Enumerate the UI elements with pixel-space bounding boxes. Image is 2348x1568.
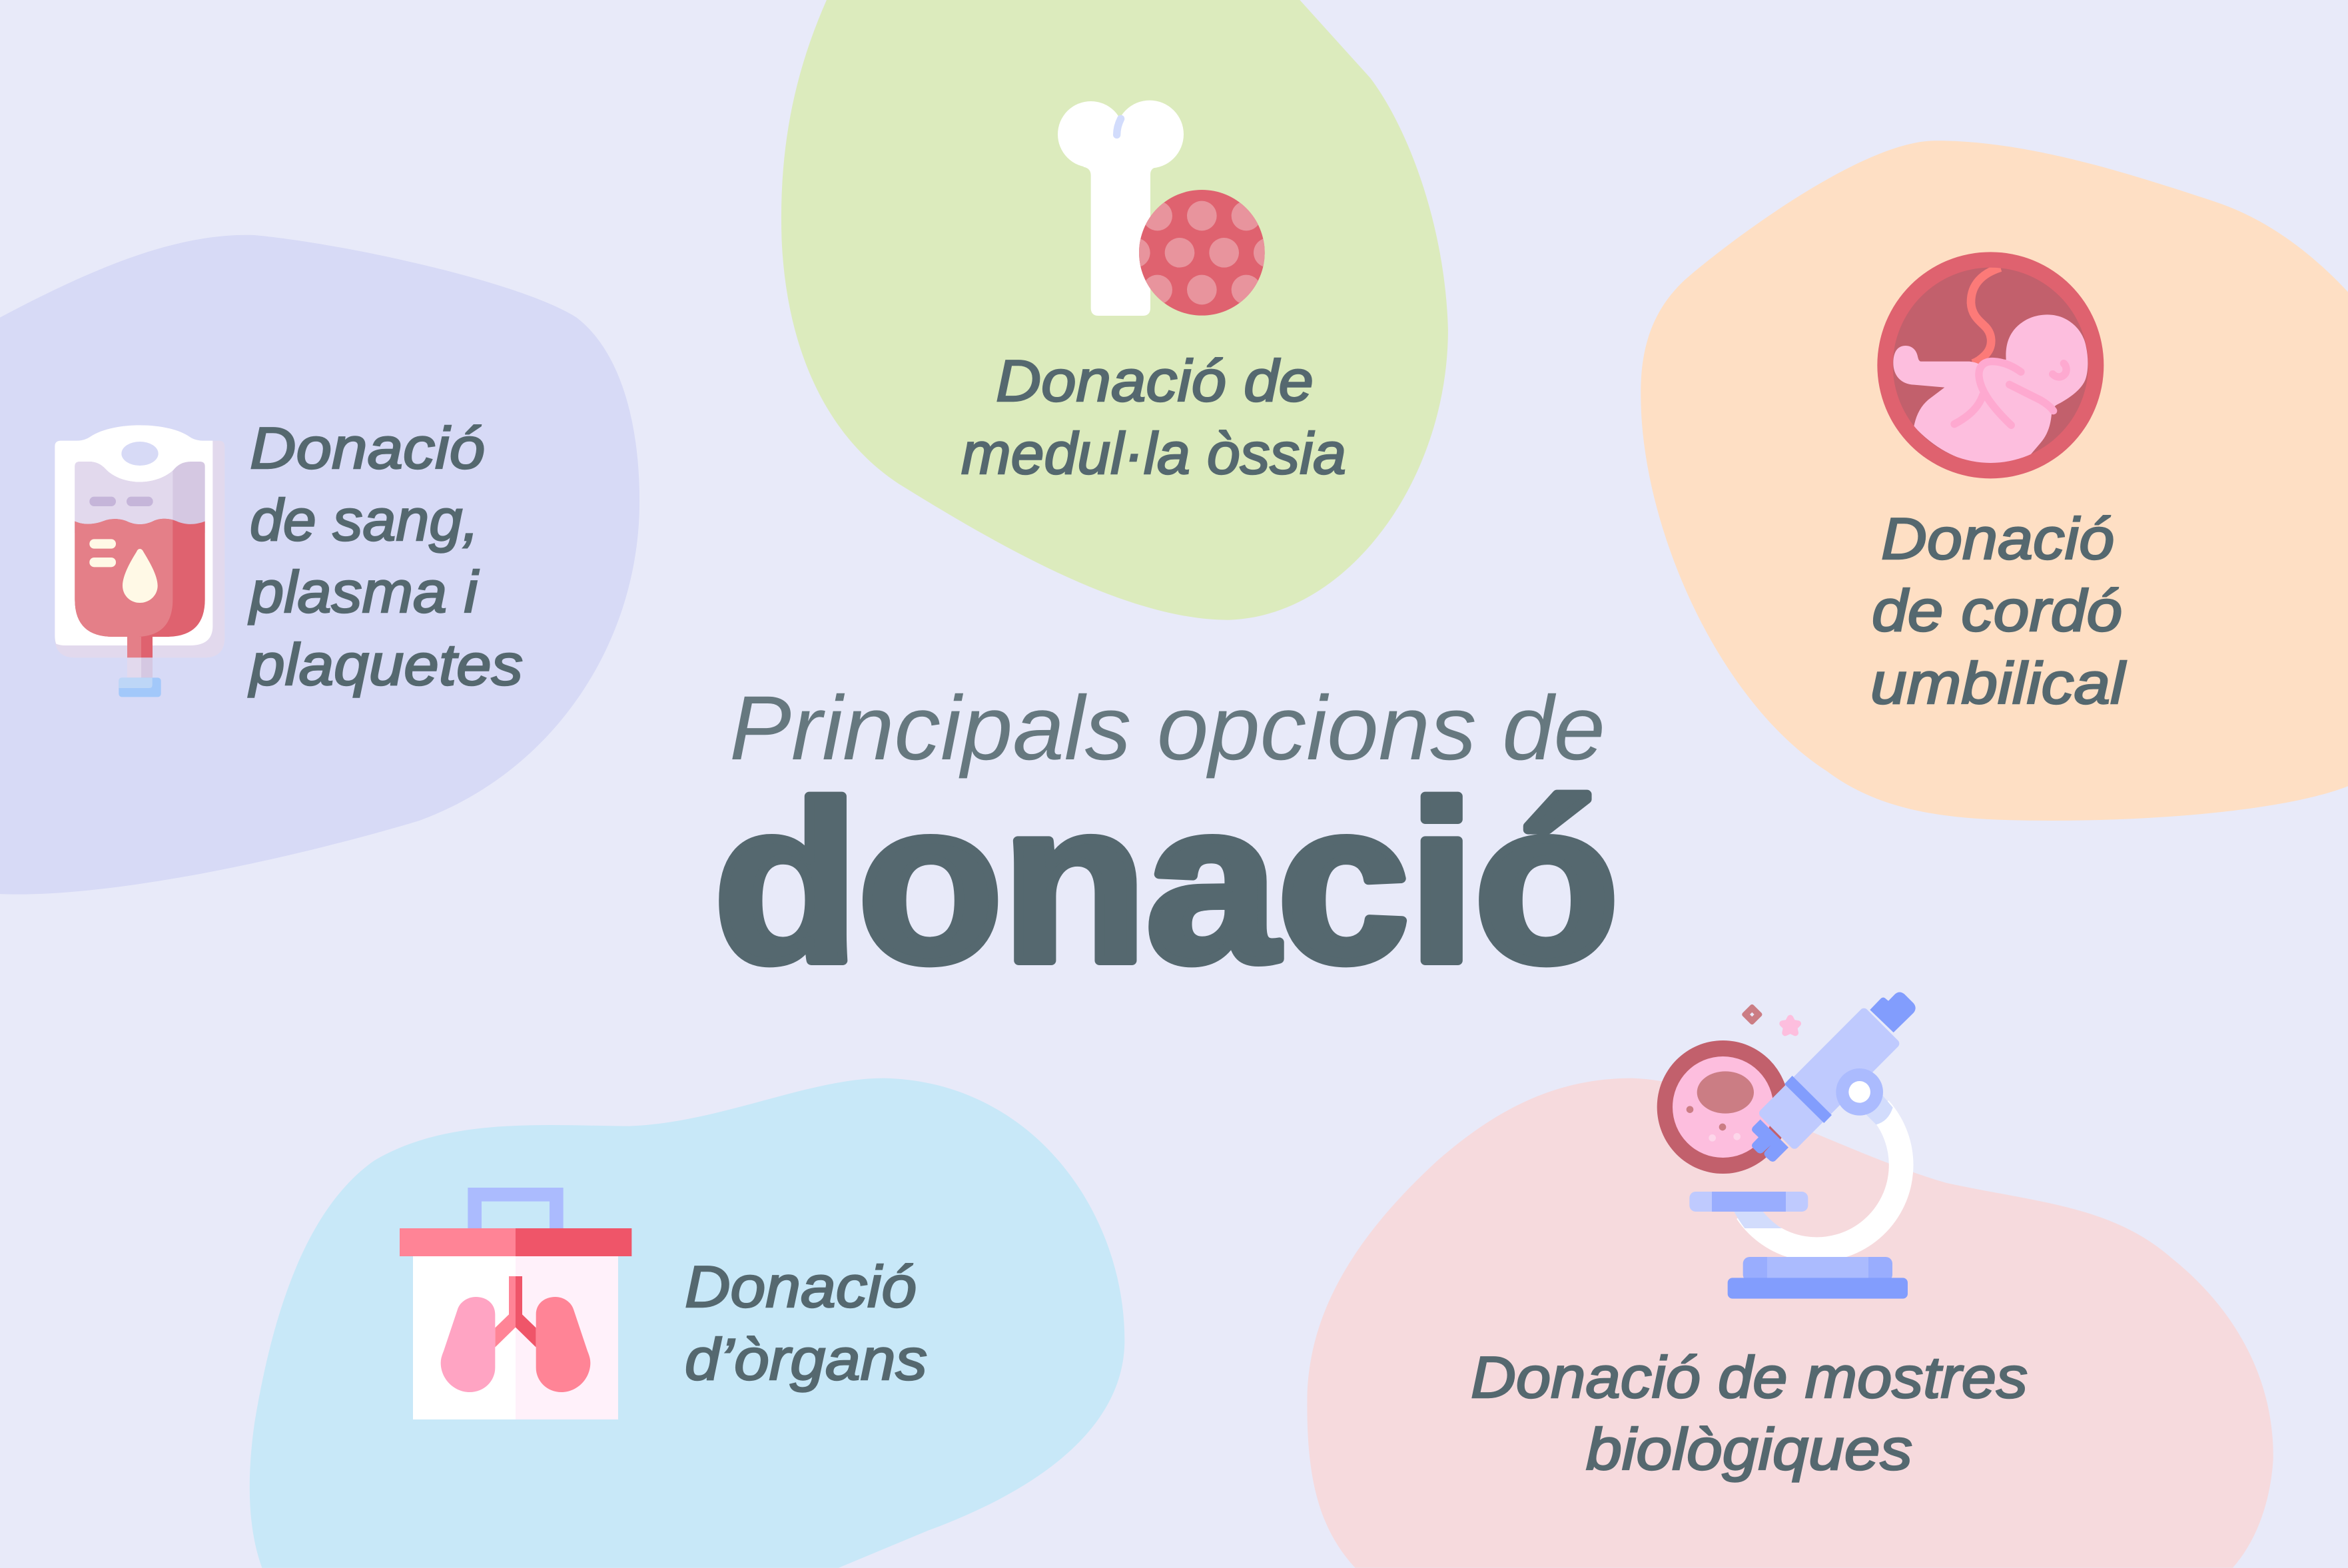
- panel: bone marrow donation: [781, 0, 1448, 620]
- text: biological samples label: biològiques: [1586, 1416, 1912, 1482]
- text: blood donation label: Donació: [250, 415, 485, 481]
- text: blood donation label: de sang,: [250, 487, 479, 553]
- text: blood donation label: [248, 415, 523, 697]
- title: main word: donació: [714, 756, 1619, 1009]
- text: biological samples label: Donació de mostres: [1471, 1344, 2028, 1410]
- text: organ donation label: d’òrgans: [685, 1326, 927, 1392]
- icon: fetus in womb: [1877, 252, 2104, 478]
- text: organ donation label: Donació: [685, 1254, 917, 1320]
- icon: bone and marrow: [1058, 101, 1284, 316]
- title: [714, 677, 1619, 1009]
- icon: blood bag: [55, 425, 224, 697]
- blob: green: [781, 0, 1448, 620]
- blob: purple: [0, 235, 639, 895]
- text: blood donation label: plasma i: [248, 559, 480, 625]
- panel: blood donation: [0, 235, 639, 895]
- panel: umbilical cord donation: [1641, 141, 2348, 821]
- text: umbilical cord label: de cordó: [1872, 578, 2122, 643]
- text: biological samples label: [1471, 1344, 2028, 1482]
- text: bone marrow label: Donació de: [996, 348, 1314, 414]
- text: umbilical cord label: umbilical: [1870, 650, 2127, 716]
- blob: pink: [1307, 1078, 2273, 1568]
- text: bone marrow label: medul·la òssia: [961, 420, 1346, 486]
- blob: orange: [1641, 141, 2348, 821]
- blob: blue: [250, 1078, 1124, 1568]
- panel: organ donation: [250, 1078, 1124, 1568]
- text: umbilical cord label: Donació: [1881, 506, 2114, 572]
- icon: organ box with lungs: [400, 1194, 631, 1419]
- icon: microscope and cell: [1657, 992, 1916, 1299]
- text: bone marrow label: [961, 348, 1346, 486]
- title: first line: Principals opcions de: [729, 677, 1605, 779]
- text: umbilical cord label: [1870, 506, 2127, 716]
- text: organ donation label: [685, 1254, 927, 1392]
- panel: biological samples donation: [1307, 992, 2273, 1568]
- text: blood donation label: plaquetes: [248, 631, 523, 697]
